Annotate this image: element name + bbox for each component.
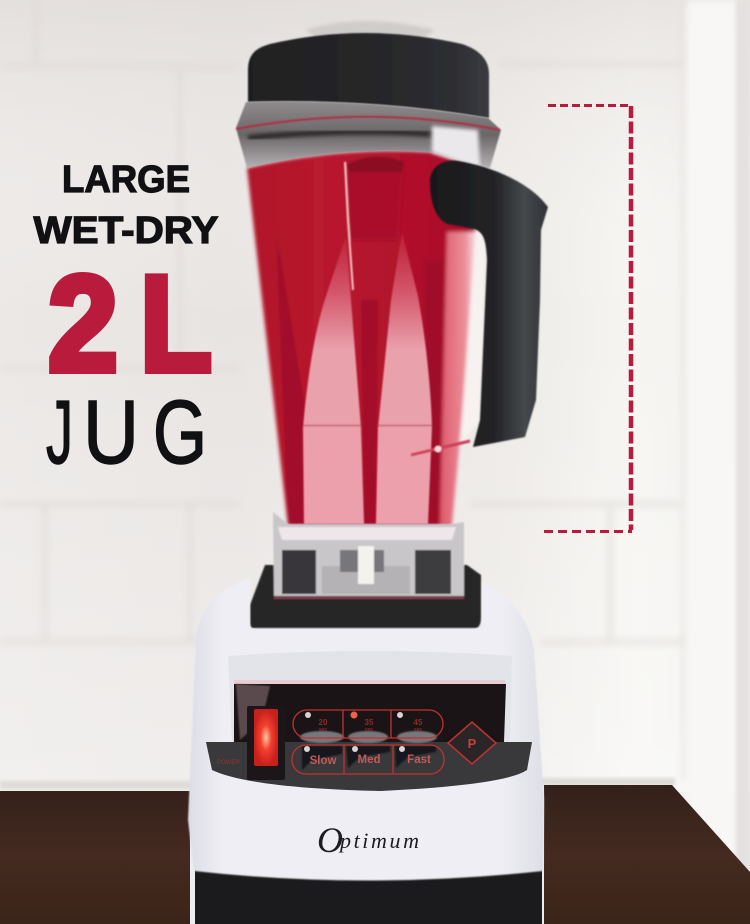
timer labels: 45 <box>414 718 423 727</box>
jug jar with juice <box>247 151 487 526</box>
pulse button <box>448 722 496 764</box>
heading: large wet-dry: WET-DRY <box>34 210 219 252</box>
button shading <box>300 731 437 770</box>
motor base lower <box>195 868 542 924</box>
counter: wooden worktop <box>0 785 750 924</box>
pink lower panels <box>303 427 364 524</box>
capacity: 2L <box>48 248 212 400</box>
speed labels: Slow <box>310 755 336 767</box>
heading: jug: G <box>153 383 207 483</box>
power switch <box>247 706 285 780</box>
indicator lights <box>304 712 405 752</box>
heading: large wet-dry <box>34 159 219 252</box>
blender <box>188 21 548 924</box>
jug collar <box>236 101 501 168</box>
speed buttons <box>292 745 444 774</box>
pulse button: P <box>468 736 477 751</box>
capacity: 2L: 2 <box>48 248 118 400</box>
speed labels <box>310 754 431 767</box>
timer labels: 35 <box>365 718 374 727</box>
timer labels: sec <box>414 727 422 733</box>
jug handle <box>430 161 548 447</box>
speed labels: Med <box>358 754 380 766</box>
jug base <box>250 512 481 630</box>
motor base housing <box>188 578 544 880</box>
timer labels: sec <box>365 727 373 733</box>
control panel <box>206 680 532 791</box>
right glass side <box>440 232 476 525</box>
timer labels <box>319 718 423 733</box>
power label: POWER <box>217 760 240 766</box>
timer labels: 20 <box>319 718 328 727</box>
timer labels: sec <box>319 727 327 733</box>
heading: jug: U <box>83 383 139 483</box>
capacity: 2L: L <box>140 248 212 400</box>
timer buttons <box>293 710 443 738</box>
inner column <box>346 162 404 240</box>
dark juice streaks <box>276 230 304 526</box>
jug lid <box>248 21 489 118</box>
pink upper panels <box>303 236 361 428</box>
brand logo: ptimum <box>338 828 422 853</box>
heading: large wet-dry: LARGE <box>62 159 190 201</box>
bracket: jug height marker <box>544 106 632 532</box>
speed labels: Fast <box>407 754 431 766</box>
drip <box>411 441 470 455</box>
heading: jug: J <box>46 383 73 483</box>
brand logo: O <box>317 820 343 860</box>
heading: jug <box>46 383 207 483</box>
